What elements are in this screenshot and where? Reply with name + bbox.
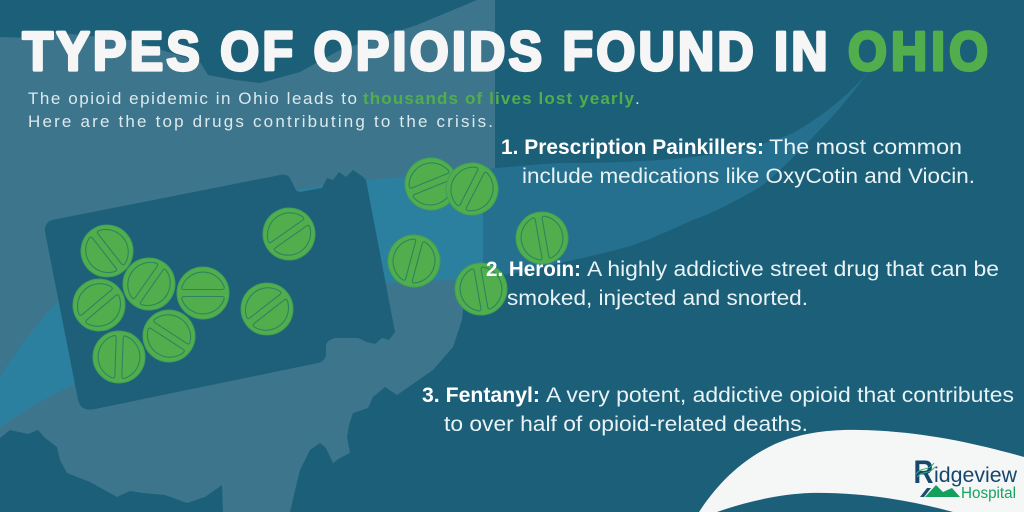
- swoosh over map: [0, 168, 500, 427]
- item 3: fentanyl: 3. Fentanyl:: [422, 383, 540, 407]
- item 1: prescription painkillers: include medications like OxyCotin and Viocin.: [522, 164, 975, 188]
- swoosh over background: [483, 70, 870, 277]
- item 1: prescription painkillers: The most common: [769, 135, 962, 159]
- logo word: idgeview: idgeview: [934, 464, 1018, 487]
- item 1: prescription painkillers: [501, 135, 975, 188]
- intro text: Here are the top drugs contributing to the crisis.: [28, 112, 493, 131]
- item 2: heroin: smoked, injected and snorted.: [507, 286, 808, 310]
- white corner curve: [699, 430, 1024, 512]
- pills on blister pack: [62, 198, 325, 384]
- item 3: fentanyl: to over half of opioid-related deaths.: [444, 412, 808, 436]
- item 3: fentanyl: A very potent, addictive opioid that contributes: [546, 383, 1014, 407]
- logo: Ridgeview Hospital: [914, 454, 1018, 502]
- logo mark: mountains: [920, 485, 960, 497]
- blister pack: [45, 170, 395, 410]
- intro text: thousands of lives lost yearly: [363, 89, 635, 108]
- intro text: .: [635, 89, 640, 108]
- title: OHIO: [848, 22, 988, 83]
- loose pills: [382, 150, 572, 319]
- intro text: [28, 89, 640, 131]
- item 2: heroin: 2. Heroin:: [486, 257, 581, 281]
- title: TYPES OF OPIOIDS FOUND IN: [22, 22, 828, 83]
- item 2: heroin: [486, 257, 999, 310]
- Ohio map silhouette: [0, 0, 495, 512]
- item 1: prescription painkillers: 1. Prescription Painkillers:: [501, 135, 764, 159]
- item 3: fentanyl: [422, 383, 1014, 436]
- logo stripes on R: [916, 463, 935, 477]
- logo letter: R: R: [914, 454, 934, 490]
- intro text: The opioid epidemic in Ohio leads to: [28, 89, 357, 108]
- item 2: heroin: A highly addictive street drug that can be: [587, 257, 999, 281]
- logo word: Hospital: Hospital: [961, 485, 1016, 502]
